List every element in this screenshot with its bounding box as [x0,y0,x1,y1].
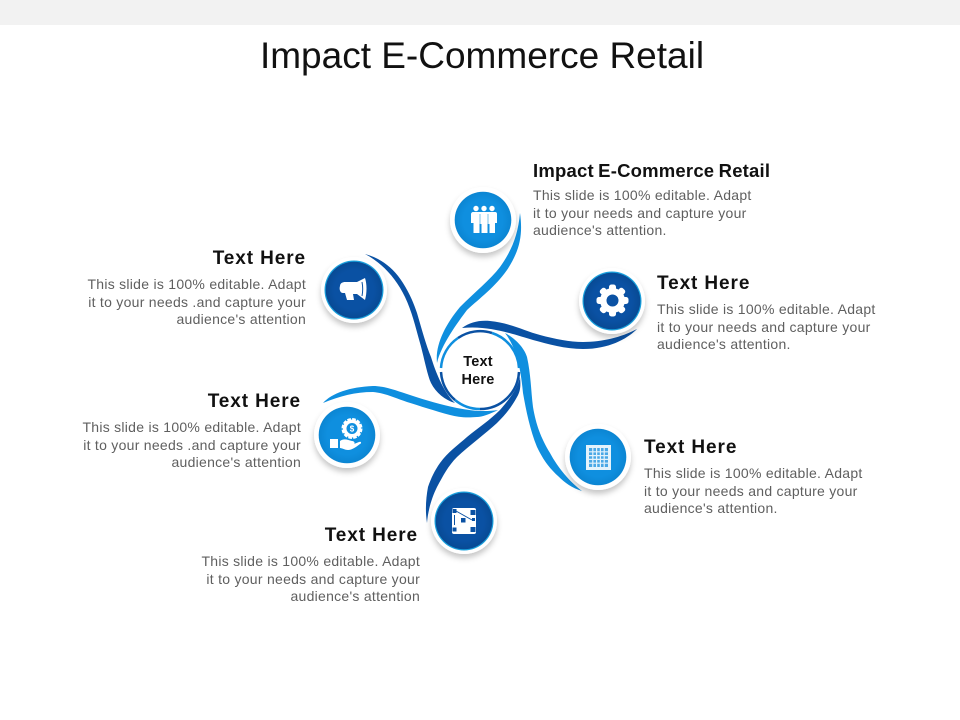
text block: left dollar [82,391,301,470]
icon: megaphone [340,278,366,300]
description: it to your needs .and capture your [83,436,301,452]
text block: right gear [657,273,876,352]
icon: gear [596,284,628,316]
description: audience's attention. [644,500,778,516]
description: it to your needs and capture your [533,204,747,220]
description: audience's attention [290,588,420,604]
heading: Text Here [213,248,306,269]
top band [0,0,960,25]
description [82,419,301,470]
text block: right grid [644,437,863,516]
swirl: bottom dark blue [426,377,520,523]
swirl: top light blue [437,213,521,363]
description: audience's attention. [533,222,667,238]
center ring and label disc [441,331,519,409]
text block: bottom [201,525,420,604]
node: top people [450,187,516,253]
icon: gear with dollar and hand: $ [350,424,355,434]
description [644,465,863,516]
icon: grid [586,445,611,470]
description: This slide is 100% editable. Adapt [82,419,301,435]
heading: Text Here [657,273,750,294]
description: audience's attention [172,454,301,470]
description: This slide is 100% editable. Adapt [533,187,752,203]
swirl: gear dark blue [462,321,637,349]
icon: people [471,206,497,233]
description [201,553,420,604]
heading: Text Here [325,525,418,546]
node: gear [579,268,645,334]
text block: left megaphone [87,248,306,327]
description: it to your needs and capture your [657,318,871,334]
swirl: megaphone dark blue [365,254,455,403]
description [87,276,306,327]
center label [461,354,495,388]
node: bottom [431,488,497,554]
description [657,301,876,352]
description: This slide is 100% editable. Adapt [201,553,420,569]
description: it to your needs .and capture your [88,294,306,310]
description: it to your needs and capture your [206,570,420,586]
node: dollar hand [314,402,380,468]
heading: Text Here [208,391,301,412]
description: audience's attention. [657,336,791,352]
node: grid [565,424,631,490]
center label: Here [461,372,495,388]
description [533,187,752,238]
description: This slide is 100% editable. Adapt [87,276,306,292]
swirl: dollar light blue [323,386,498,417]
center label: Text [463,354,493,370]
icon: vector shape [452,508,476,534]
node: megaphone [321,257,387,323]
description: it to your needs and capture your [644,482,858,498]
description: This slide is 100% editable. Adapt [644,465,863,481]
heading: Text Here [644,437,737,458]
description: audience's attention [176,311,306,327]
description: This slide is 100% editable. Adapt [657,301,876,317]
swirl: grid light blue [505,333,582,491]
text block: top right [533,160,770,238]
title: Impact E-Commerce Retail [260,35,704,76]
heading: Impact E-Commerce Retail [533,160,770,181]
